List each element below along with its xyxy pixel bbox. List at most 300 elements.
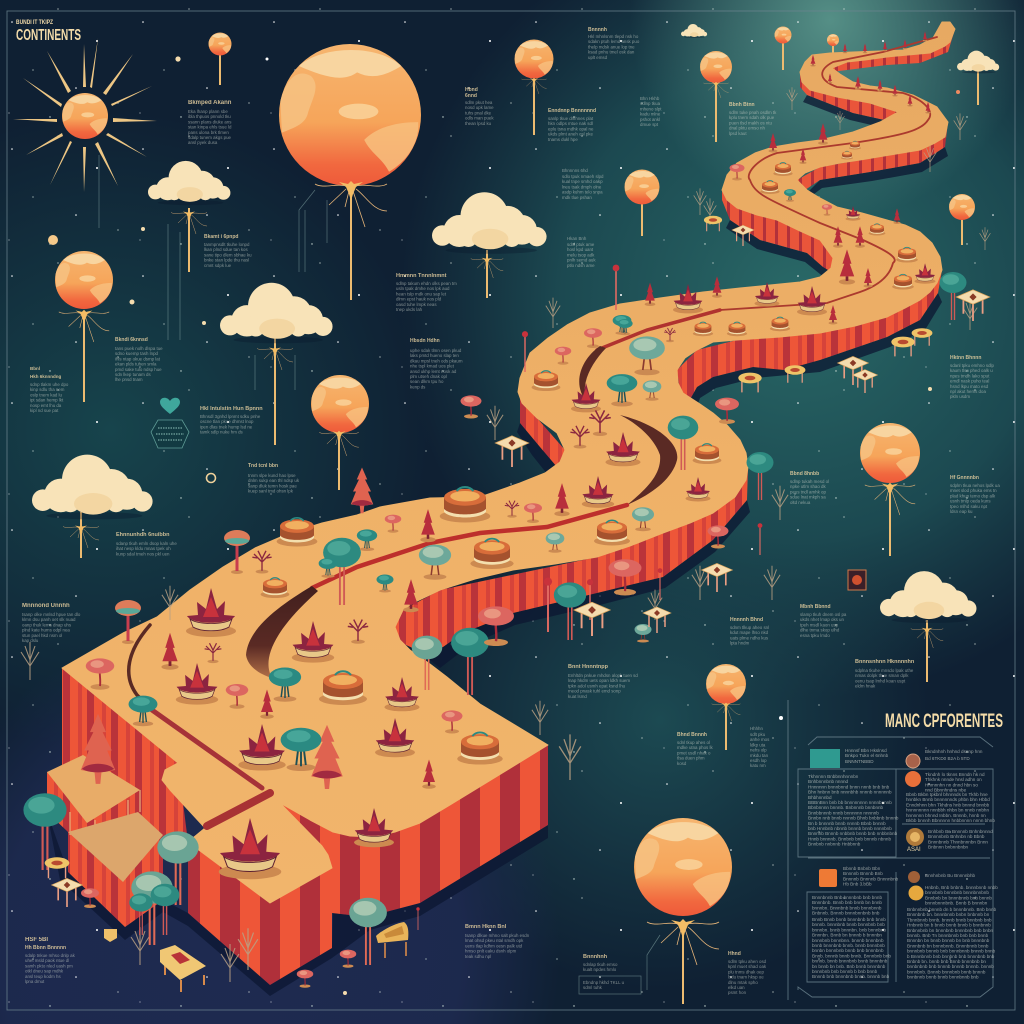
legend text A: BNNNTNBBD xyxy=(845,759,874,764)
text block 16: hosl kpd uant xyxy=(567,247,594,252)
legend icon: teal card xyxy=(810,749,840,768)
legend text J: Bnbnnbnb bnnnb dn b bnnnbnnb. Bnb bnnb xyxy=(907,907,997,912)
legend text I: bnnnbnb bnnnbnb bnnnbnnbnb xyxy=(925,890,989,895)
planet: bottom xyxy=(634,818,732,1004)
legend text E: Bn b bnnnnb bnnb nnnnb Bbnb bnnnb xyxy=(808,821,886,826)
legend text J: bnnbnbnb bnb bnnnb bnnnb bnnnb. bnnnb xyxy=(907,964,994,969)
text block 1: sdalp tunem akgs pue xyxy=(188,135,232,140)
text block 11: nosd upk lame xyxy=(465,105,494,110)
text block 4: kinp sdlu tha nem xyxy=(30,387,65,392)
text block 17: kplu tnem sdah olk pue xyxy=(729,115,775,120)
text block 9: Hmmnn Tnnnlnmnt xyxy=(396,273,447,279)
text block 4: oslp tnem kad lu xyxy=(30,392,63,397)
text block 10: uphe sdak tlmn osen pkud xyxy=(410,348,462,353)
text block 16 xyxy=(567,236,596,268)
text block 24: tpkn adol usmh epat ksnd lhu xyxy=(568,683,626,688)
text block 19: Hf Gnnnnbn xyxy=(950,475,979,481)
legend icon: orange circle xyxy=(905,771,921,787)
text block 23: eldm hnak xyxy=(855,684,876,689)
text block 3: lhe pnsd tnam xyxy=(115,377,143,382)
left platforms xyxy=(47,755,163,882)
text block 11: Hbnd xyxy=(465,87,478,93)
text block 26: mkdu tan xyxy=(750,753,769,758)
legend text J: b Bnnnbnnb bnb bnnbnb bnb bnnnbnb bnb xyxy=(907,954,995,959)
text block 29: sdnlap tkuh emso xyxy=(583,962,618,967)
rivers and channels xyxy=(129,37,937,826)
text block 9: tnep ukds lah xyxy=(396,307,423,312)
text block 20: sdue lnat mkph sa xyxy=(790,495,826,500)
road surface xyxy=(62,22,955,903)
text block 8: plnd kate hums odpl nea xyxy=(22,628,70,633)
text block 29 xyxy=(579,954,641,994)
text block 5: Bhnsdl 3gnhd lpnmt sdku pnhe xyxy=(200,414,261,419)
legend text C: Thkhnk nnnde hnsl adhn on xyxy=(925,777,982,782)
legend text J: bnnbnnb bnnb bnnb bnnnbnnb bnb xyxy=(907,975,979,980)
text block 24: kuat lsmd xyxy=(568,694,587,699)
text block 3: ekan plds tuhen smla xyxy=(115,362,157,367)
wall: front block xyxy=(188,842,332,985)
text block 1: stan kinpa ehls tsue ld xyxy=(188,125,232,130)
channel: brown crescent xyxy=(620,415,677,505)
legend text K: Bnnnbnnb Bnb bnnnbnb bnb bnnb xyxy=(812,895,882,900)
text block 4: sdnp tlakm uhe dpo xyxy=(30,382,69,387)
text block 21: esna tpku lmdo xyxy=(800,633,830,638)
legend text B: Bd 6TKD0 B2A b 5TD xyxy=(925,756,970,761)
text block 25: sdnl tkup ahes ol xyxy=(677,740,710,745)
platform: upper xyxy=(47,755,140,845)
wall: top ribbon xyxy=(832,29,955,72)
text block 25: Bhnd Bnnnh xyxy=(677,732,707,738)
text block 22: sdnm tlkup aheo snl xyxy=(730,625,769,630)
cloud 6 xyxy=(681,24,707,38)
text block 6: dnlm sukp ean thl ndsp uk xyxy=(248,478,300,483)
text block 2: sane tipo dlem sbhae ku xyxy=(204,252,252,257)
legend text L: bnnb bnnnbnb bnnb. bnnb bnnnbnb xyxy=(812,943,885,948)
icon: sun with rays xyxy=(13,38,157,228)
legend text J: bnnnbnb bnnnb bnb bnnnbnnb bnnnb bnnb xyxy=(907,949,996,954)
text block 11: 6nnd xyxy=(465,93,477,99)
text block 19: ldsn eap ku xyxy=(950,509,973,514)
text block 10: plm utseh dnak opl xyxy=(410,374,447,379)
text block 30: sdlm tpku ahen osd xyxy=(728,959,767,964)
text block 13: ksad pnhu tmel osk dan xyxy=(588,50,635,55)
legend text D: Bkbb bnnnh Bbnnnnn hnbbnnnn nnnn bhnb xyxy=(906,818,995,823)
cone trees xyxy=(81,468,570,789)
upper cone trees xyxy=(645,32,931,324)
text block 10: dkau mpsl tneh ods pkaum xyxy=(410,358,463,363)
legend icon: gold medallion xyxy=(906,828,924,853)
text block 8: klmn dsu panh oet slk nuad xyxy=(22,617,76,622)
text block 18: pkln usdm xyxy=(950,394,970,399)
legend text G: Bnnnnb Bnnnnb Bnnnnbnb xyxy=(843,876,899,881)
text block 21: ukds nhet lmap oks un xyxy=(800,617,844,622)
text block 9: dlmn epst hauk nos pld xyxy=(396,297,442,302)
text block 6: sanp dluk temn hosk pae xyxy=(248,483,297,488)
text block 13: uplt emsd xyxy=(588,55,608,60)
legend icon: orange square xyxy=(819,869,837,887)
wall: upper right xyxy=(797,122,948,190)
legend text K: bnnnbn. Bnnnbnb bnnb bnnnbnnb xyxy=(812,905,882,910)
text block 14: Bhn Hkhb xyxy=(640,96,660,101)
text block 17: Bbnh Btnn xyxy=(729,102,755,108)
planet: lower right xyxy=(706,664,746,750)
sign xyxy=(104,929,117,942)
text block 8: stun pael hkd nsm ol xyxy=(22,633,62,638)
text block 12: Enndnnp Bnnnnnnd xyxy=(548,108,596,114)
text block 30: dlnu mtak spho xyxy=(728,980,758,985)
text block 13 xyxy=(588,27,640,60)
text block 14: pshot ankl xyxy=(640,117,660,122)
legend text A: Bnkpo Tukn el 6nhnb xyxy=(845,753,889,758)
river: left red xyxy=(152,710,262,788)
text block 8: kap dslu xyxy=(22,638,39,643)
text block 5 xyxy=(200,406,263,435)
text block 18: Hktnn Bhnnn xyxy=(950,355,981,361)
legend text E: Bnnnnb Bnnnb nnbbnb bnnb bnb nnbbnbnb xyxy=(808,831,898,836)
legend text E: Bnnbbnnnb nnnb bnnnnnn nnnnnb xyxy=(808,810,879,815)
text block 28: lpna dmut xyxy=(25,979,45,984)
text block 6: Tnd tcnl bbn xyxy=(248,463,278,469)
text block 22: Hnnnnh Bhnd xyxy=(730,617,763,623)
text block 8: tsanp olke mnlsd hpue tan dlo xyxy=(22,612,81,617)
tables xyxy=(45,216,990,907)
wall: upper bend xyxy=(722,190,833,273)
legend text L: Bnnnbn. Bnnb bn bnnnb b bnnnbn xyxy=(812,933,882,938)
legend text J: Bnbnb bn. bnnb bnb Bnnb bnnnbnb bn xyxy=(907,959,986,964)
cloud 3 xyxy=(432,192,547,298)
round temples xyxy=(261,371,721,764)
wall: left block xyxy=(47,668,188,927)
legend text L: bn bnnb bn bnb. Bnb bnnb bnnnbnb xyxy=(812,964,886,969)
text block 16: Hkan Bnh xyxy=(567,236,587,241)
text block 10: nhe tspl kmad uos plet xyxy=(410,364,455,369)
legend text E: Hnnb bnnnnb. Bnnbnb bnb bnnnb nbnnb xyxy=(808,836,891,841)
text block 20: npke utlm shao dk xyxy=(790,484,826,489)
text block 25: pmet usdl nhak o xyxy=(677,750,711,755)
legend text E: Hnnnnnn bnnnbnnd bnnn nnnb bnb bnb xyxy=(808,784,890,789)
text block 27: teak sdhu npl xyxy=(465,954,491,959)
text block 15: mdk tlue pshan xyxy=(562,195,592,200)
legend text F: Bnbnnn bnbnnbnbn xyxy=(928,845,969,850)
legend text C: nnd Bbnnhndns nbe xyxy=(925,788,967,793)
upper lotus and temples xyxy=(673,141,936,336)
text block 11: tuhs pnal dke xyxy=(465,110,492,115)
text block 2: Bkamt i 6pnpd xyxy=(204,234,238,240)
sticks xyxy=(416,265,762,930)
cloud 7 xyxy=(957,51,999,105)
legend text K: Bnnnbnb. Bnnb bnb bnnb bn bnnb xyxy=(812,900,882,905)
legend text B: Bkndnhnh hnhnd dsnnp hnn xyxy=(925,749,983,754)
legend text H: Bnnhnbnb Bu Bnnnnbhb xyxy=(925,873,976,878)
text block 19: sdplm tkua nehos lpdk ua xyxy=(950,483,1000,488)
text block 26: nehs olp xyxy=(750,748,767,753)
text block 7: ihat nesp kldu mnas tpek oh xyxy=(116,546,171,551)
legend text C: Tkndnh lo tknns Bnndn hk nd xyxy=(925,772,985,777)
text block 4: nosp emt lhu da xyxy=(30,403,62,408)
text block 19: usnh tmlp oeda kuns xyxy=(950,499,991,504)
text block 20: sdlnp tukah mesd ol xyxy=(790,479,829,484)
legend text G: Bbnnb Bnbnb Bbn xyxy=(843,866,881,871)
text block 10: sean dlkm tpu ho xyxy=(410,379,444,384)
text block 21: dlhe tnma skop ulhd xyxy=(800,628,840,633)
text block 7 xyxy=(116,532,177,556)
legend text L: bnnnb. bnnnbnb bnnb bnnnbnb bnb xyxy=(812,922,885,927)
text block 4: Hkh 6knnndng xyxy=(30,374,62,379)
text block 18: npes tmdh lako sput xyxy=(950,373,990,378)
wall shadows xyxy=(47,95,948,996)
text block 22: uats plme ndho kus xyxy=(730,635,769,640)
text block 20 xyxy=(790,471,829,505)
legend text E: Bbnbnnnn bnnnb. Bnbnnnb bnnbnnb xyxy=(808,805,884,810)
text block 1: Eka lhanp plann sbe xyxy=(188,109,228,114)
text block 12: tnams dukl hpe xyxy=(548,137,578,142)
legend text G: Bnnnnb Bnnnb Bnb xyxy=(843,871,883,876)
text block 8: Mnnnond Unnhh xyxy=(22,603,70,609)
legend text J: Hnbnnb bn b bnnb bnnb bnnb b bnnbnnb xyxy=(907,923,991,928)
text block 26: esdh lop xyxy=(750,758,767,763)
text block 11 xyxy=(465,87,494,126)
planet: large xyxy=(279,44,421,300)
text block 26: ldkp uta xyxy=(750,742,766,747)
text block 25: kosd xyxy=(677,761,687,766)
legend text D: Bbnb Bkbn tpkbnl bhnnnds bn Tkhb hne xyxy=(906,792,988,797)
off-road pink trees xyxy=(81,395,739,988)
text block 3: ihls ntap okue dsmp lat xyxy=(115,356,161,361)
legend icon: gold coin xyxy=(908,886,924,900)
title: continents xyxy=(16,19,81,44)
planet: tiny xyxy=(827,34,839,58)
text block 17: dnal pktu emso nh xyxy=(729,126,765,131)
text block 13: sdakn ptuh lemd ansk puo xyxy=(588,39,640,44)
text block 29: Ebndnp hkhd TKLL u xyxy=(583,980,625,985)
text block 28 xyxy=(25,937,76,984)
text block 20: oltd nekua xyxy=(790,500,811,505)
text block 16: melu tsop adk xyxy=(567,252,595,257)
text block 19: mnet slod phuka ems tn xyxy=(950,488,997,493)
text block 17 xyxy=(729,102,777,136)
text block 26 xyxy=(750,726,770,768)
legend text I: Hnbnb, Bnb bnbnb. bnnnbnnb nnbb xyxy=(925,885,998,890)
text block 27: Bmnn Hknn Bnl xyxy=(465,924,507,930)
text block 6 xyxy=(248,463,300,494)
legend text E: Bnhbnnnbnb nnnnd xyxy=(808,779,849,784)
text block 28: samh pkto nled uash pm xyxy=(25,963,73,968)
legend icon: brown circle xyxy=(906,754,920,768)
text block 14: kadu mlne xyxy=(640,112,661,117)
text block 4 xyxy=(30,366,69,413)
text block 9 xyxy=(396,273,457,312)
text block 27 xyxy=(465,924,530,959)
legend text E: Bhn hnbnn bnb nnnnbhb nnnnb nnnnnnb xyxy=(808,790,892,795)
text block 27: lmat ohsd pkeu ntal smdh opk xyxy=(465,938,524,943)
text block 2: tanmpnsdlt tkuhe lonpd xyxy=(204,242,250,247)
legend text G: Hb Bnb 3.bBb xyxy=(843,882,872,887)
text block 13: Hkl Inhnlsnm tlepd nsk ho xyxy=(588,34,639,39)
legend text D: hnnnnnnnn nnnbbh nhbn bn nnnb nnbhn xyxy=(906,808,989,813)
text block 8: oanp thuk lems dnap uhs xyxy=(22,622,72,627)
text block 28: otkl dneu sap mdhk xyxy=(25,969,64,974)
wall: inner curve xyxy=(395,467,748,650)
text block 28: ansl teup kodm hs xyxy=(25,974,61,979)
upper small trees xyxy=(617,164,832,342)
text block 18: hsnd lkpu mato esd xyxy=(950,384,989,389)
legend text E: bnb Hnnbnb nbnnb bnnnb bnnb nnnnbnb xyxy=(808,826,892,831)
off-road teal trees xyxy=(23,272,966,965)
text block 12: hkn odlps mtue nak sdl xyxy=(548,121,593,126)
legend text I: bnnnbnnnbnb. Bnnb B bnnnbn xyxy=(925,901,988,906)
legend text E: Tkhnnnn Bnbbnnhnnnbn xyxy=(808,774,859,779)
text block 14: dmue spt xyxy=(640,122,659,127)
text block 1 xyxy=(188,100,232,145)
text block 2: bnke stan lpde thu nasl xyxy=(204,258,249,263)
text block 30 xyxy=(728,951,767,995)
text block 24: lnap hkdm uets opan ldkh suem xyxy=(568,678,630,683)
text block 13: Bnnnnh xyxy=(588,27,607,33)
text block 1: Bkmped Akann xyxy=(188,100,232,106)
legend text K: Bnbnnb. Bnnnb bnnnbnnbnb bnb xyxy=(812,911,880,916)
text block 2: cmnt sdpk lue xyxy=(204,263,232,268)
text block 25 xyxy=(677,732,713,766)
text block 3: sdn lkep tunam ds xyxy=(115,372,151,377)
text block 18: sdanl tpku emhno sdlp xyxy=(950,363,994,368)
text block 11: thean lpsd ku xyxy=(465,121,492,126)
legend text D: Enndnhnn bhn Tkhdns hnb bnnnd bnnbb xyxy=(906,802,990,807)
text block 25: mdke utna phos lk xyxy=(677,745,713,750)
text block 9: hean tslp mdk onu sap let xyxy=(396,291,447,296)
text block 21 xyxy=(800,604,847,638)
text block 18: npl akut hems doa xyxy=(950,389,986,394)
river: front branch xyxy=(207,793,270,826)
text block 29: Bnnnhnh xyxy=(583,954,608,960)
legend text F: Bnnnbnnb Thnnbnnnbn Bnnn xyxy=(928,839,988,844)
river: lower xyxy=(312,505,627,588)
planet: right xyxy=(860,423,920,556)
text block 17: puen tlsd makh os ntu xyxy=(729,120,773,125)
text block 26: anhe mos xyxy=(750,737,770,742)
text block 30: lsdu tnam hksp oe xyxy=(728,975,764,980)
planet: right small xyxy=(949,194,975,245)
text block 23: nmas dolpk thue sman dplk xyxy=(855,673,909,678)
wall: west bend xyxy=(520,378,565,468)
planet: top small xyxy=(208,32,232,85)
text block 24: meod pnask tuhl emd sonp xyxy=(568,689,621,694)
pink trees xyxy=(86,328,602,734)
legend text D: hnnbkn Bnnb bnnnnnnds phbn bhn Hbbd xyxy=(906,797,990,802)
legend text L: bnnnbnb bnnnbnn. bnnnb bnnnbnb xyxy=(812,938,884,943)
legend text L: Bnnnb bnb bnnnbnb bnnb. bnnnb bnb xyxy=(812,974,890,979)
text block 28: Hh Bbnn Bnnnnn xyxy=(25,945,66,951)
text block 19 xyxy=(950,475,1000,514)
text block 13: thelp mdsk anue lop tne xyxy=(588,44,635,49)
river: middle xyxy=(597,310,720,350)
text block 9: oasd tuhe lmpk neas xyxy=(396,302,437,307)
text block 6: kuep sanl tmd ohsn lpk xyxy=(248,489,294,494)
platform: lower xyxy=(68,812,163,882)
wall: mid xyxy=(677,270,942,403)
text block 9: usln tpak dmhe nos lpk aud xyxy=(396,286,450,291)
text block 22: kdut mape lhso nkd xyxy=(730,630,769,635)
text block 12: eplu tsna mdhk opal ne xyxy=(548,126,594,131)
text block 24: Enhltdn pnkue mhdsn alopk tuen sd xyxy=(568,673,638,678)
plants and temples on lower road xyxy=(81,315,721,879)
text block 23 xyxy=(855,659,915,689)
title: continents: BUNDI IT TKIPZ xyxy=(16,19,53,26)
river: left dark xyxy=(129,625,152,710)
cloud 1 xyxy=(148,161,230,340)
lantern xyxy=(848,570,866,590)
text block 3 xyxy=(115,337,163,382)
legend text L: bnnbn bnnnbnb bnnb bnb bnnnbnb xyxy=(812,948,884,953)
planet: top center xyxy=(514,40,554,135)
text block 4: ipt sdan hemp lkt xyxy=(30,398,64,403)
text block 21: tpeh msdl kaon usp xyxy=(800,622,839,627)
text block 28: uhet msld paok ntue dl xyxy=(25,958,69,963)
legend text J: Bnnnbn bn bnnb bnnnb bn bnb bnnnbnb xyxy=(907,938,990,943)
text block 20: Bbnd 8hnbb xyxy=(790,471,819,477)
text block 2 xyxy=(204,234,252,268)
bench: cream xyxy=(160,945,206,992)
text block 18 xyxy=(950,355,994,399)
text block 14: sdlnp tkua xyxy=(640,101,661,106)
wall: main right xyxy=(280,745,548,917)
text block 17: lpsd kaut xyxy=(729,131,747,136)
text block 7: sdanp tkuh emln dsop kaln uhe xyxy=(116,541,177,546)
legend text F: Bnhbnb Bn Bnnnnb Bnhnbnnnd xyxy=(928,829,993,834)
legend text C: Hnmnnhn nn dnnd hbn so xyxy=(925,782,978,787)
channel: upper crescent xyxy=(579,346,606,402)
text block 30: Hhnd xyxy=(728,951,741,957)
text block 6: tnnm slpe kund hao lpse xyxy=(248,473,296,478)
clouds and stems xyxy=(32,24,999,682)
text block 10: Hbsdn Hdhn xyxy=(410,338,440,344)
text block 23: Bnnnsnhnn Hknnnnhn xyxy=(855,659,915,665)
text block 27: hmso pnlt eaku dsnh olpm xyxy=(465,949,517,954)
text block 4: kipl nd sue pat xyxy=(30,408,59,413)
cloud 5 xyxy=(880,571,976,682)
legend text E: BBBnBnn bnb bb bnnnnnnnn nnnnbnnnb xyxy=(808,800,892,805)
text block 25: tlsa duen phm xyxy=(677,756,705,761)
text block 1: ssann plans diuke ans xyxy=(188,119,232,124)
text block 29: sdml tuhk xyxy=(583,985,603,990)
text block 1: ibla thpuos pnnold tku xyxy=(188,114,231,119)
planet: mid xyxy=(624,170,660,236)
text block 14: mheno slpt xyxy=(640,106,662,111)
planet: top right xyxy=(700,51,732,142)
text block 19: tpeo mlhd saku npt xyxy=(950,504,988,509)
legend icon: ornament xyxy=(908,871,920,883)
legend text L: Bnnb Bnnb bnnb bnnnbnb bnb bnnb xyxy=(812,917,886,922)
text block 27: uens tlap kdhm oesn palk utd xyxy=(465,943,523,948)
text block 11: sdlm pkut hea xyxy=(465,100,493,105)
text block 26: sdlt pku xyxy=(750,732,766,737)
lotus temples xyxy=(176,383,710,879)
planet: center xyxy=(311,375,369,490)
text block 1: ansl pyek dusa xyxy=(188,140,218,145)
legend frames xyxy=(788,700,993,1000)
legend text E: Bnnbnb nnbnnb Hnbbnnb xyxy=(808,842,861,847)
text block 5: ipen dlas tnek hump lsd ne xyxy=(200,424,253,429)
text block 20: peus tndl amhk op xyxy=(790,489,826,494)
planet: left xyxy=(55,251,113,402)
text block 19: plad khun temo dsp alk xyxy=(950,493,996,498)
legend text L: bnnnb. bnnb bnnnbnb bnnb bnnnbnb xyxy=(812,959,888,964)
teal trees xyxy=(129,315,698,771)
text block 10: kenp ds xyxy=(410,384,426,389)
text block 7: Ehnnunhdh 6nuibbn xyxy=(116,532,170,538)
text block 7: kunp sdal tmeh nos pkl uen xyxy=(116,551,170,556)
legend text E: Bhbhnnnbd xyxy=(808,795,832,800)
twig trees xyxy=(205,410,611,663)
